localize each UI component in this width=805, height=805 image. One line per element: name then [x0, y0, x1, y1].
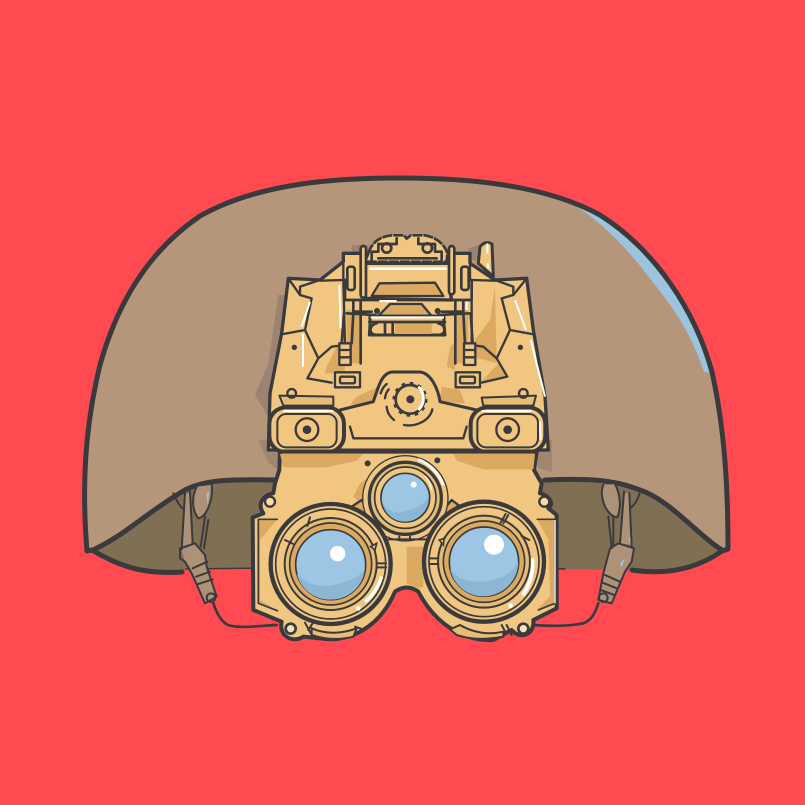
right strap clip and cable: [532, 484, 640, 626]
helmet shell: [85, 178, 728, 551]
vertical clamp posts: [347, 246, 469, 298]
helmet inner padding: [92, 470, 723, 572]
goggle mount upper assembly: [255, 235, 548, 452]
goggle lower assembly: [253, 451, 557, 640]
ear holes: [265, 497, 275, 507]
buckles: [335, 343, 480, 387]
clamp knobs: [372, 238, 442, 260]
housing shading: [325, 287, 508, 405]
side panels: [283, 262, 532, 383]
right lens: [424, 502, 544, 639]
blue helmet reflection: [565, 199, 712, 373]
shadow beside goggle plate: [258, 440, 552, 472]
right adjustment knob: [471, 407, 545, 452]
top clamp: [365, 235, 447, 262]
plate shading: [258, 454, 555, 610]
inner rail bracket: [378, 304, 432, 316]
left strap clip and cable: [173, 485, 277, 627]
shelves over knobs: [279, 396, 536, 406]
lower plate: [253, 452, 557, 640]
crossbar and rails: [342, 280, 473, 363]
main housing: [268, 253, 548, 450]
bridge arms: [352, 500, 458, 515]
highlights: [302, 243, 545, 397]
cast shadow: [255, 245, 480, 443]
helmet outline: [85, 178, 728, 572]
left adjustment knob: [269, 407, 344, 452]
clamp window: [372, 283, 443, 296]
central gear housing: [337, 372, 483, 450]
left lens: [271, 504, 391, 639]
clamp block: [365, 263, 452, 300]
centre lens: [363, 456, 448, 541]
antenna post: [478, 242, 493, 277]
gear: [381, 384, 432, 425]
